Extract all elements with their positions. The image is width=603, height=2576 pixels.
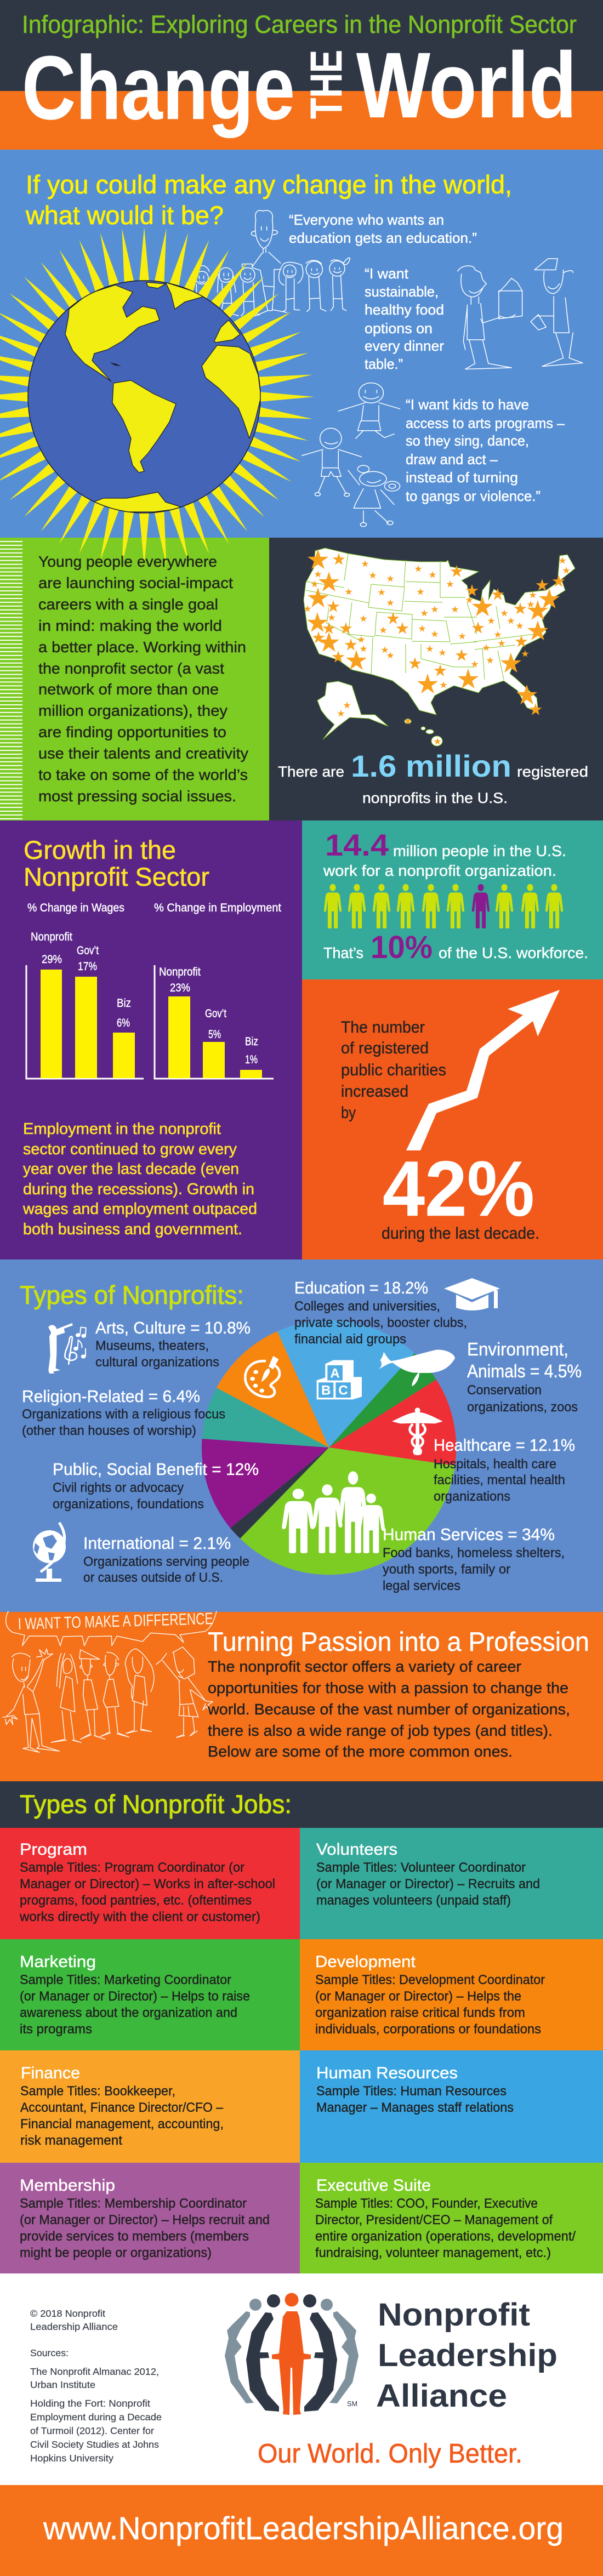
card: membership: provide services to members (members: [20, 2229, 249, 2244]
card: volunteers: (or Manager or Director) – Recruits and: [316, 1877, 540, 1891]
label: education: financial aid groups: [294, 1332, 406, 1347]
text block: intro: a better place. Working within: [38, 639, 246, 656]
bar chart: change in employment: Biz: [245, 1035, 258, 1048]
quote: arts: “I want kids to have: [406, 396, 529, 413]
quote: food: sustainable,: [365, 283, 439, 300]
text block: intro: the nonprofit sector (a vast: [38, 660, 224, 677]
panel: types of nonprofits: [0, 1259, 603, 1612]
card: executive suite: fundraising, volunteer management, etc.): [315, 2246, 551, 2260]
text block: copyright and sources: Employment during a Decade: [30, 2412, 162, 2423]
card: marketing: its programs: [20, 2022, 92, 2037]
label: international: Organizations serving people: [83, 1554, 249, 1569]
icon: family: [282, 1472, 385, 1553]
card: membership: (or Manager or Director) – Helps recruit and: [20, 2213, 270, 2227]
text: the number of registered public charities increased by: by: [341, 1104, 356, 1122]
text: the number of registered public charities increased by: increased: [341, 1082, 408, 1101]
text block: copyright and sources: Civil Society Studies at Johns: [30, 2439, 159, 2450]
text block: copyright and sources: © 2018 Nonprofit: [30, 2308, 105, 2319]
icon: palette: [245, 1356, 280, 1397]
text: the number of registered public charities increased by: public charities: [341, 1061, 446, 1079]
icon: whale: [377, 1350, 455, 1386]
text block: employment growth: wages and employment outpaced: [22, 1200, 257, 1218]
label: arts: cultural organizations: [95, 1355, 219, 1370]
quote: arts: [406, 396, 565, 504]
text block: intro: careers with a single goal: [38, 596, 218, 613]
text block: employment growth: [22, 1120, 257, 1238]
label: human services: legal services: [383, 1578, 460, 1593]
statistic: 14.4 million people: 14.4: [325, 828, 389, 862]
panel: growth in the nonprofit sector: [0, 820, 302, 1259]
label: public benefit: organizations, foundations: [53, 1497, 204, 1512]
label: healthcare: facilities, mental health: [434, 1473, 565, 1488]
card: membership: [0, 2163, 300, 2273]
statistic: 14.4 million people: million people in the U.S.: [393, 842, 566, 859]
label: healthcare: Healthcare = 12.1%: [434, 1435, 575, 1455]
label: environment: Animals = 4.5%: [467, 1361, 582, 1381]
quote: food: table.”: [365, 356, 403, 372]
text block: intro: are launching social-impact: [38, 574, 233, 591]
statistic: 14.4 million people: [323, 828, 566, 879]
bar chart: change in wages: Biz: [117, 997, 131, 1010]
quote: arts: draw and act –: [406, 451, 498, 468]
statistic: 1.6 million registered nonprofits: [278, 749, 588, 806]
globe: [28, 281, 261, 513]
quote: education: [289, 212, 477, 246]
icon: caduceus: [392, 1407, 443, 1455]
sketch: teacher and children: [196, 210, 350, 316]
text block: copyright and sources: The Nonprofit Almanac 2012,: [30, 2366, 159, 2377]
panel: intro background: [0, 538, 269, 820]
quote: arts: to gangs or violence.”: [406, 488, 541, 504]
icon: graduation cap: [444, 1278, 500, 1310]
title: Change the World: [22, 33, 577, 138]
label: international: or causes outside of U.S.: [83, 1570, 223, 1585]
label: human services: youth sports, family or: [383, 1562, 510, 1577]
card: program: [0, 1828, 300, 1939]
text block: copyright and sources: Hopkins University: [30, 2453, 113, 2464]
card: development: Development: [315, 1953, 416, 1971]
text block: intro: are finding opportunities to: [38, 723, 226, 740]
text block: copyright and sources: [30, 2308, 162, 2464]
quote: education: education gets an education.”: [289, 230, 477, 246]
statistic: 14.4 million people: work for a nonprofit organization.: [323, 862, 556, 879]
label: arts: Museums, theaters,: [95, 1338, 209, 1353]
label: education: private schools, booster clubs,: [294, 1315, 467, 1330]
pie chart: [202, 1320, 456, 1575]
statistic: 1.6 million registered nonprofits: nonprofits in the U.S.: [362, 790, 508, 806]
statistic: 10 percent of workforce: [323, 930, 588, 965]
label: international: [83, 1534, 249, 1585]
panel: header: [0, 0, 603, 150]
label: religion: Organizations with a religious focus: [22, 1407, 225, 1422]
heading: [24, 835, 209, 891]
text block: copyright and sources: of Turmoil (2012). Center for: [30, 2425, 154, 2436]
label: healthcare: organizations: [434, 1489, 510, 1504]
caption: during the last decade.: [382, 1224, 539, 1243]
heading: Types of Nonprofits:: [20, 1280, 244, 1309]
text block: intro: million organizations), they: [38, 702, 227, 719]
text block: intro: [38, 553, 248, 805]
text: the number of registered public charities increased by: The number: [341, 1018, 425, 1036]
label: arts: [95, 1318, 251, 1370]
card: volunteers: [300, 1828, 603, 1939]
text: the number of registered public charities increased by: [341, 1018, 446, 1122]
text block: world. Because of the vast number of organizations,: [207, 1701, 570, 1718]
bar chart: change in wages: Gov’t: [77, 944, 99, 957]
label: healthcare: [434, 1435, 575, 1504]
card: finance: [0, 2050, 300, 2163]
card: executive suite: [300, 2163, 603, 2273]
icon: ABC blocks: A: [330, 1366, 340, 1381]
bar chart: change in employment: 1%: [245, 1053, 258, 1066]
card: membership: might be people or organizations): [20, 2246, 212, 2260]
statistic: 42 percent: 42%: [383, 1145, 534, 1233]
icon row: ten people, one highlighted: [324, 884, 563, 928]
card: development: [300, 1939, 603, 2050]
card: finance: risk management: [20, 2133, 122, 2148]
logo: Nonprofit Leadership Alliance: Leadership: [378, 2338, 558, 2373]
text block: intro: in mind: making the world: [38, 617, 222, 634]
text block: there is also a wide range of job types (and titles).: [208, 1722, 553, 1739]
icon: ABC blocks: C: [338, 1383, 348, 1398]
card: marketing: (or Manager or Director) – Helps to raise: [20, 1989, 250, 2004]
logo: Nonprofit Leadership Alliance: Alliance: [376, 2378, 507, 2414]
label: human services: [383, 1525, 565, 1593]
card: human resources: [300, 2050, 603, 2163]
card: volunteers: Sample Titles: Volunteer Coordinator: [316, 1860, 526, 1875]
bar chart: change in wages: Nonprofit: [31, 931, 72, 943]
text block: intro: Young people everywhere: [38, 553, 217, 570]
text block: intro: use their talents and creativity: [38, 745, 248, 762]
text: the number of registered public charities increased by: of registered: [341, 1039, 429, 1057]
text block: employment growth: year over the last decade (even: [23, 1160, 239, 1178]
text block: intro: to take on some of the world’s: [38, 766, 248, 783]
text block: employment growth: sector continued to grow every: [23, 1141, 237, 1158]
label: environment: organizations, zoos: [467, 1400, 578, 1415]
bar chart: change in employment: Gov’t: [205, 1007, 226, 1020]
label: human services: Human Services = 34%: [383, 1525, 555, 1544]
text block: opportunities for those with a passion to change the: [208, 1679, 568, 1696]
card: executive suite: Sample Titles: COO, Founder, Executive: [315, 2196, 538, 2211]
label: environment: Environment,: [467, 1339, 568, 1359]
logo: Nonprofit Leadership Alliance: Nonprofit: [378, 2297, 530, 2333]
card: program: Manager or Director) – Works in after-school: [20, 1877, 275, 1891]
heading: Nonprofit Sector: [24, 862, 209, 891]
heading: If you could make any change in the world,: [26, 170, 512, 199]
card: executive suite: entire organization (operations, development/: [315, 2229, 576, 2244]
card: marketing: awareness about the organization and: [20, 2005, 237, 2020]
bar chart: change in wages: [26, 902, 144, 1079]
icon: musician: [48, 1323, 86, 1374]
label: healthcare: Hospitals, health care: [434, 1457, 556, 1472]
statistic: 10 percent of workforce: That’s: [323, 944, 363, 961]
card: human resources: Manager – Manages staff relations: [316, 2100, 514, 2115]
logo: Nonprofit Leadership Alliance: SM: [347, 2400, 357, 2408]
bar chart: change in employment: [154, 902, 281, 1079]
card: executive suite: Director, President/CEO – Management of: [315, 2213, 553, 2227]
panel: public charities increase: [302, 979, 603, 1259]
sketch: two men with groceries: [458, 259, 583, 369]
bar chart: change in wages: 29%: [42, 953, 62, 966]
sketch: group wanting to make a difference: [3, 1610, 217, 1752]
arrow: rising trend: [406, 990, 560, 1150]
card: program: works directly with the client or customer): [19, 1910, 260, 1924]
text block: copyright and sources: Sources:: [30, 2347, 69, 2358]
panel: footer: [0, 2273, 603, 2485]
label: religion: Religion-Related = 6.4%: [22, 1387, 200, 1406]
text block: intro: most pressing social issues.: [38, 788, 236, 805]
panel: types of nonprofit jobs heading: [0, 1781, 603, 1828]
heading: [25, 170, 512, 230]
bar chart: change in wages: % Change in Wages: [27, 902, 124, 914]
bar chart: change in wages: 17%: [78, 960, 97, 973]
bar chart: change in employment: Nonprofit: [159, 966, 201, 978]
card: marketing: [0, 1939, 300, 2050]
card: marketing: Sample Titles: Marketing Coordinator: [20, 1973, 231, 1987]
panel: website banner: [0, 2485, 603, 2576]
label: human services: Food banks, homeless shelters,: [383, 1546, 565, 1560]
statistic: 1.6 million registered nonprofits: There are: [278, 763, 344, 780]
card: program: Sample Titles: Program Coordinator (or: [20, 1860, 244, 1875]
illustration: globe with sun rays: [0, 227, 314, 567]
text block: employment growth: both business and government.: [23, 1221, 242, 1238]
card: volunteers: manages volunteers (unpaid staff): [316, 1893, 511, 1908]
text block: intro: network of more than one: [38, 681, 219, 698]
quote: arts: instead of turning: [406, 469, 518, 486]
bar chart: change in employment: % Change in Employment: [154, 902, 281, 914]
card: executive suite: Executive Suite: [316, 2176, 431, 2195]
card: development: (or Manager or Director) – Helps the: [315, 1989, 521, 2004]
subtitle: Infographic: Exploring Careers in the Nonprofit Sector: [22, 10, 577, 38]
label: education: Education = 18.2%: [294, 1278, 428, 1297]
sketch: group wanting to make a difference: I WANT TO MAKE A DIFFERENCE: [18, 1610, 213, 1633]
panel: map: [269, 538, 603, 820]
label: environment: Conservation: [467, 1383, 542, 1398]
card: finance: Sample Titles: Bookkeeper,: [20, 2084, 175, 2099]
card: marketing: Marketing: [20, 1953, 96, 1971]
US map with stars: [304, 548, 575, 746]
label: international: International = 2.1%: [83, 1534, 231, 1553]
label: environment: [467, 1339, 582, 1415]
card: finance: Accountant, Finance Director/CFO –: [20, 2100, 224, 2115]
quote: food: “I want: [365, 265, 409, 282]
heading: Turning Passion into a Profession: [208, 1627, 589, 1657]
card: human resources: Sample Titles: Human Resources: [316, 2084, 507, 2099]
title: Change the World: THE: [302, 50, 351, 119]
quote: food: every dinner: [365, 338, 444, 354]
icon: desk globe: [33, 1523, 66, 1582]
card: membership: Membership: [20, 2176, 115, 2195]
text block: copyright and sources: Leadership Alliance: [30, 2321, 118, 2332]
panel: types of nonprofit jobs heading: Types of Nonprofit Jobs:: [20, 1789, 292, 1819]
statistic: 1.6 million registered nonprofits: 1.6 million: [351, 749, 511, 783]
quote: food: [365, 265, 444, 372]
statistic: 10 percent of workforce: of the U.S. workforce.: [439, 944, 588, 961]
card: program: programs, food pantries, etc. (oftentimes: [20, 1893, 252, 1908]
label: public benefit: [53, 1460, 259, 1512]
tagline: Our World. Only Better.: [258, 2439, 522, 2469]
label: arts: Arts, Culture = 10.8%: [95, 1318, 251, 1337]
card: development: Sample Titles: Development Coordinator: [315, 1973, 545, 1987]
statistic: 1.6 million registered nonprofits: registered: [517, 763, 588, 780]
quote: arts: so they sing, dance,: [406, 432, 529, 449]
label: religion: (other than houses of worship): [22, 1423, 196, 1438]
logo: Nonprofit Leadership Alliance: [225, 2293, 558, 2415]
card: development: individuals, corporations or foundations: [315, 2022, 541, 2037]
statistic: 10 percent of workforce: 10%: [371, 930, 433, 965]
bar chart: change in wages: 6%: [117, 1017, 130, 1029]
panel: turning passion into a profession: [0, 1610, 603, 1781]
text block: copyright and sources: Urban Institute: [30, 2379, 95, 2390]
quote: education: “Everyone who wants an: [289, 212, 444, 228]
card: human resources: Human Resources: [316, 2064, 458, 2082]
bar chart: change in employment: 5%: [208, 1028, 221, 1041]
label: education: Colleges and universities,: [294, 1299, 440, 1314]
text block: Below are some of the more common ones.: [208, 1743, 513, 1760]
card: finance: Finance: [21, 2064, 80, 2082]
icon: ABC blocks: B: [321, 1383, 331, 1398]
panel: workforce statistic: [302, 820, 603, 979]
card: program: Program: [20, 1840, 87, 1859]
panel: website banner: www.NonprofitLeadershipAlliance.org: [43, 2511, 564, 2546]
card: development: organization raise critical funds from: [315, 2005, 525, 2020]
panel: what would you change: [0, 150, 603, 538]
text block: copyright and sources: Holding the Fort: Nonprofit: [30, 2398, 150, 2409]
card: membership: Sample Titles: Membership Coordinator: [20, 2196, 247, 2211]
heading: Growth in the: [24, 835, 176, 864]
card: volunteers: Volunteers: [316, 1840, 397, 1859]
sketch: dancing kids: [302, 383, 400, 527]
quote: food: healthy food: [365, 301, 444, 318]
sun rays: [0, 227, 314, 567]
title: Change the World: Change: [22, 37, 295, 138]
text block: employment growth: Employment in the nonprofit: [23, 1120, 221, 1138]
text block: employment growth: during the recessions). Growth in: [23, 1181, 254, 1198]
bar chart: change in employment: 23%: [170, 982, 190, 994]
label: education: [294, 1278, 467, 1347]
text block: The nonprofit sector offers a variety of career: [208, 1658, 521, 1675]
label: public benefit: Civil rights or advocacy: [53, 1480, 184, 1495]
label: religion: [22, 1387, 225, 1438]
icon: ABC blocks: [317, 1360, 362, 1399]
quote: food: options on: [365, 320, 433, 337]
text block: [207, 1658, 570, 1760]
quote: arts: access to arts programs –: [406, 415, 565, 431]
heading: what would it be?: [25, 201, 224, 230]
card: finance: Financial management, accounting,: [20, 2117, 224, 2132]
label: public benefit: Public, Social Benefit = 12%: [53, 1460, 259, 1479]
